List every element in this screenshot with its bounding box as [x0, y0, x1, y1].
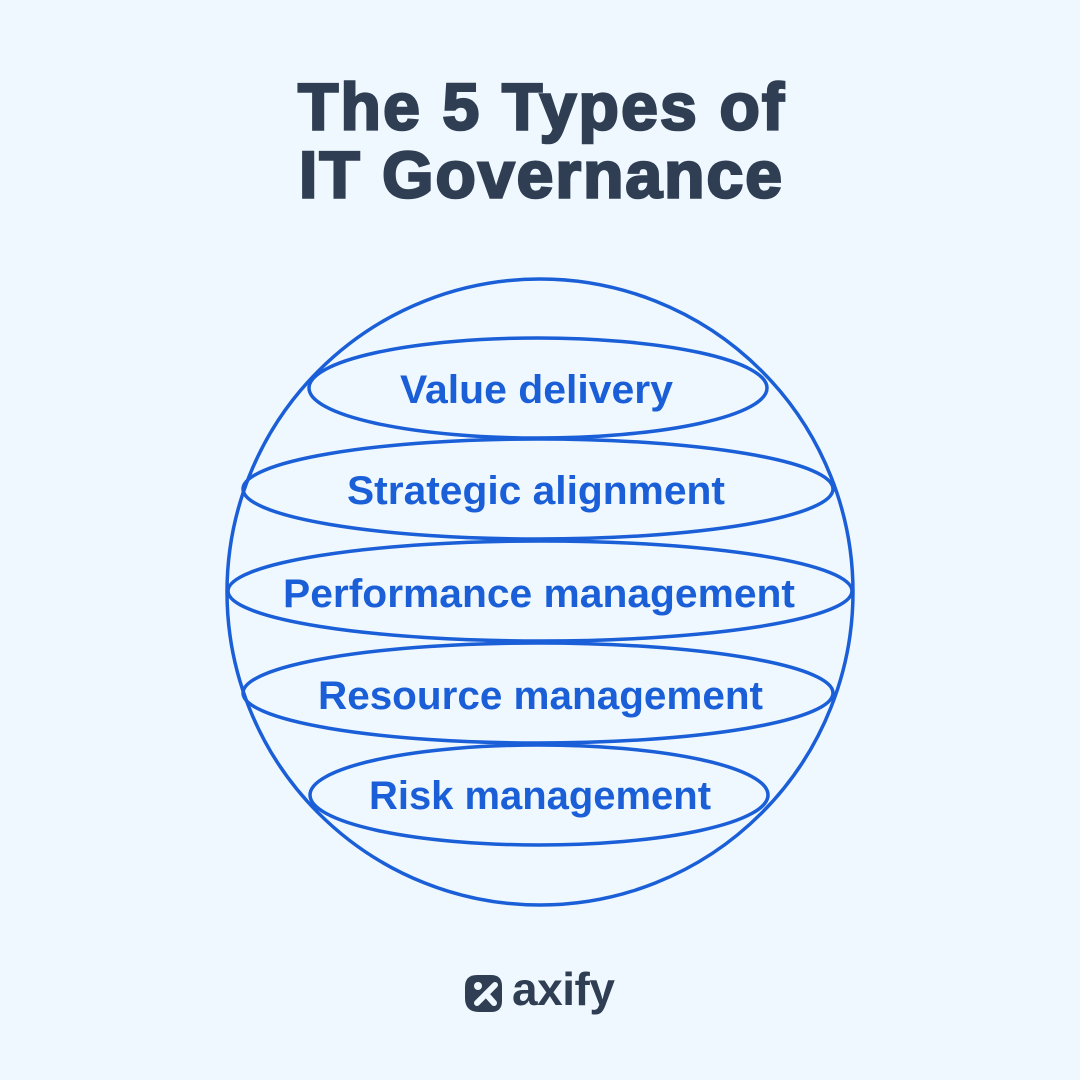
title [298, 70, 785, 212]
icon: axify mark [465, 975, 502, 1012]
globe outline [227, 279, 853, 905]
logo: axify [465, 963, 615, 1015]
band: performance management: Performance management [283, 572, 795, 616]
title: The 5 Types of [298, 70, 785, 144]
band: resource management [243, 643, 833, 743]
band: resource management: Resource management [318, 674, 763, 718]
title: IT Governance [299, 138, 782, 212]
band: strategic alignment: Strategic alignment [347, 469, 725, 513]
band: strategic alignment [243, 439, 833, 539]
band: value delivery: Value delivery [400, 368, 674, 412]
globe diagram [227, 279, 853, 905]
band: value delivery [309, 338, 767, 438]
band: risk management [310, 745, 768, 845]
wordmark: axify [512, 963, 615, 1015]
band: risk management: Risk management [369, 774, 711, 818]
band: performance management [228, 541, 852, 641]
